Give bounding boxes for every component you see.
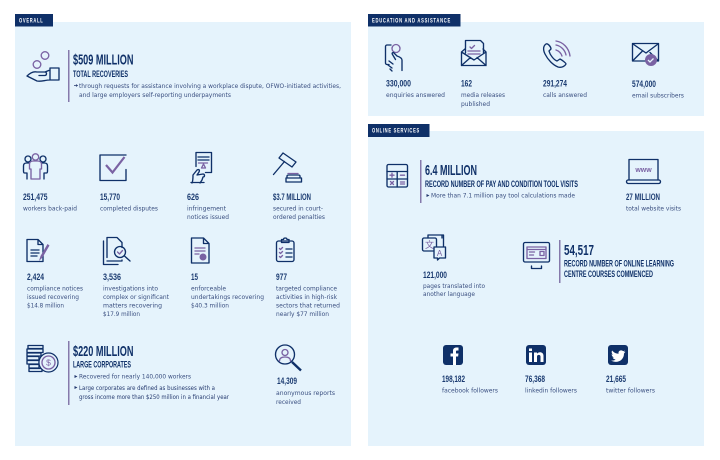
stat: workers back-paid: [23, 154, 77, 213]
panel: overall: [15, 14, 351, 446]
stat: calls answered: [543, 41, 587, 99]
stat: infringement notices: 626: [187, 192, 199, 203]
stat: website visits: 27 MILLION: [626, 192, 660, 203]
stat: website visits: www: [634, 167, 652, 174]
icon: coins: [27, 346, 58, 372]
stat: compliance notices: issued recovering: [27, 294, 79, 301]
stat: email subscribers: [632, 44, 684, 100]
stat: media releases: [461, 40, 505, 108]
stat: investigations: $17.9 million: [103, 311, 140, 318]
heading tab: overall: [15, 14, 53, 26]
callout: total recoveries: through requests for assistance involving a workplace dispute, OFWO-initiated activities,: [79, 83, 341, 90]
stat: enforceable undertakings: enforceable: [191, 286, 226, 293]
stat: investigations: [103, 238, 170, 318]
stat: website visits: [626, 160, 681, 213]
stat: media releases: media releases: [461, 92, 505, 99]
stat: targeted compliance activities: 977: [276, 272, 287, 283]
stat: infringement notices: infringement: [187, 206, 227, 213]
stat: targeted compliance activities: nearly $77 million: [276, 311, 329, 318]
stat: compliance notices: $14.8 million: [27, 302, 64, 310]
stat: targeted compliance activities: targeted compliance: [276, 286, 337, 293]
stat: completed disputes: completed disputes: [100, 206, 158, 213]
icon: hand with coins: [27, 52, 59, 81]
stat: enquiries answered: [386, 44, 445, 99]
callout: online learning centre courses: [559, 240, 674, 283]
stat: enforceable undertakings: 15: [191, 272, 198, 283]
stat: twitter followers: 21,665: [606, 374, 626, 385]
stat: twitter followers: twitter followers: [606, 388, 655, 394]
heading tab: education and assistance: [368, 14, 460, 26]
stat: pages translated: another language: [423, 291, 475, 298]
stat: calls answered: 291,274: [543, 78, 567, 90]
panel: education and assistance: [368, 14, 704, 116]
stat: facebook followers: [442, 345, 498, 394]
stat: workers back-paid: workers back-paid: [23, 206, 77, 213]
stat: compliance notices: 2,424: [27, 272, 45, 283]
stat: workers back-paid: 251,475: [23, 192, 48, 203]
stat: facebook followers: facebook followers: [442, 388, 498, 394]
callout: pay and condition tool: RECORD NUMBER OF PAY AND CONDITION TOOL VISITS: [425, 179, 578, 190]
heading tab: overall: OVERALL: [19, 18, 44, 24]
stat: anonymous reports: anonymous reports: [276, 390, 335, 397]
stat: enquiries answered: enquiries answered: [386, 92, 445, 99]
stat: email subscribers: 574,000: [632, 79, 656, 90]
stat: enforceable undertakings: $40.3 million: [191, 302, 229, 310]
stat: enforceable undertakings: undertakings recovering: [191, 294, 264, 301]
stat: compliance notices: compliance notices: [27, 286, 83, 293]
stat: pages translated: pages translated into: [423, 283, 485, 290]
stat: infringement notices: [187, 152, 229, 221]
callout: large corporates: $220 MILLION: [73, 343, 134, 360]
stat: media releases: published: [461, 101, 490, 108]
callout: online learning centre courses: 54,517: [564, 242, 594, 259]
stat: linkedin followers: 76,368: [525, 374, 545, 385]
stat: court-ordered penalties: $3.7 MILLION: [273, 192, 311, 203]
stat: anonymous reports: received: [276, 399, 301, 406]
icon: monitor with course: [524, 242, 550, 268]
stat: investigations: matters recovering: [103, 302, 162, 310]
callout: online learning centre courses: CENTRE COURSES COMMENCED: [564, 269, 653, 280]
stat: linkedin followers: linkedin followers: [525, 388, 577, 394]
callout: pay and condition tool: More than 7.1 million pay tool calculations made: [431, 192, 575, 200]
stat: investigations: complex or significant: [103, 294, 170, 301]
callout: large corporates: gross income more than $250 million in a financial year: [79, 394, 229, 401]
stat: pages translated: A: [437, 249, 443, 258]
heading tab: online services: [368, 124, 430, 137]
stat: court-ordered penalties: secured in court-: [273, 206, 323, 213]
stat: pages translated: 121,000: [423, 270, 447, 281]
callout: large corporates: LARGE CORPORATES: [73, 360, 131, 370]
heading tab: education and assistance: EDUCATION AND ASSISTANCE: [372, 18, 451, 24]
stat: twitter followers: [606, 345, 655, 394]
stat: pages translated: 文: [425, 238, 434, 251]
heading tab: online services: ONLINE SERVICES: [372, 128, 420, 134]
stat: court-ordered penalties: [273, 153, 325, 221]
stat: email subscribers: email subscribers: [632, 92, 684, 100]
stat: targeted compliance activities: activities in high-risk: [276, 294, 337, 301]
icon: calculator: [387, 164, 408, 187]
callout: pay and condition tool: [420, 160, 578, 203]
stat: court-ordered penalties: ordered penalties: [273, 214, 325, 221]
stat: completed disputes: 15,770: [100, 192, 120, 203]
stat: website visits: total website visits: [626, 206, 681, 213]
stat: targeted compliance activities: sectors that returned: [276, 302, 340, 310]
stat: calls answered: calls answered: [543, 92, 587, 99]
callout: large corporates: Large corporates are defined as businesses with a: [79, 385, 215, 392]
stat: linkedin followers: [525, 345, 577, 394]
stat: enforceable undertakings: [191, 238, 264, 310]
stat: completed disputes: [100, 155, 158, 213]
callout: total recoveries: TOTAL RECOVERIES: [73, 69, 128, 80]
callout: large corporates: Recovered for nearly 140,000 workers: [79, 374, 191, 381]
stat: compliance notices: [27, 240, 83, 310]
icon: coins: $: [46, 358, 51, 368]
stat: anonymous reports: 14,309: [277, 376, 297, 387]
callout: pay and condition tool: 6.4 MILLION: [425, 162, 477, 179]
stat: anonymous reports: [276, 345, 335, 406]
stat: facebook followers: 198,182: [442, 374, 465, 385]
stat: media releases: 162: [461, 78, 472, 90]
stat: targeted compliance activities: [276, 238, 340, 318]
callout: total recoveries: and large employers self-reporting underpayments: [79, 92, 231, 99]
stat: infringement notices: notices issued: [187, 214, 229, 221]
stat: enquiries answered: 330,000: [386, 78, 411, 90]
stat: pages translated: [422, 235, 485, 298]
callout: total recoveries: $509 MILLION: [73, 52, 134, 68]
stat: investigations: investigations into: [103, 286, 158, 293]
stat: investigations: 3,536: [103, 272, 121, 283]
panel: online services: [368, 124, 704, 446]
callout: large corporates: [68, 341, 229, 405]
callout: total recoveries: [68, 50, 341, 102]
